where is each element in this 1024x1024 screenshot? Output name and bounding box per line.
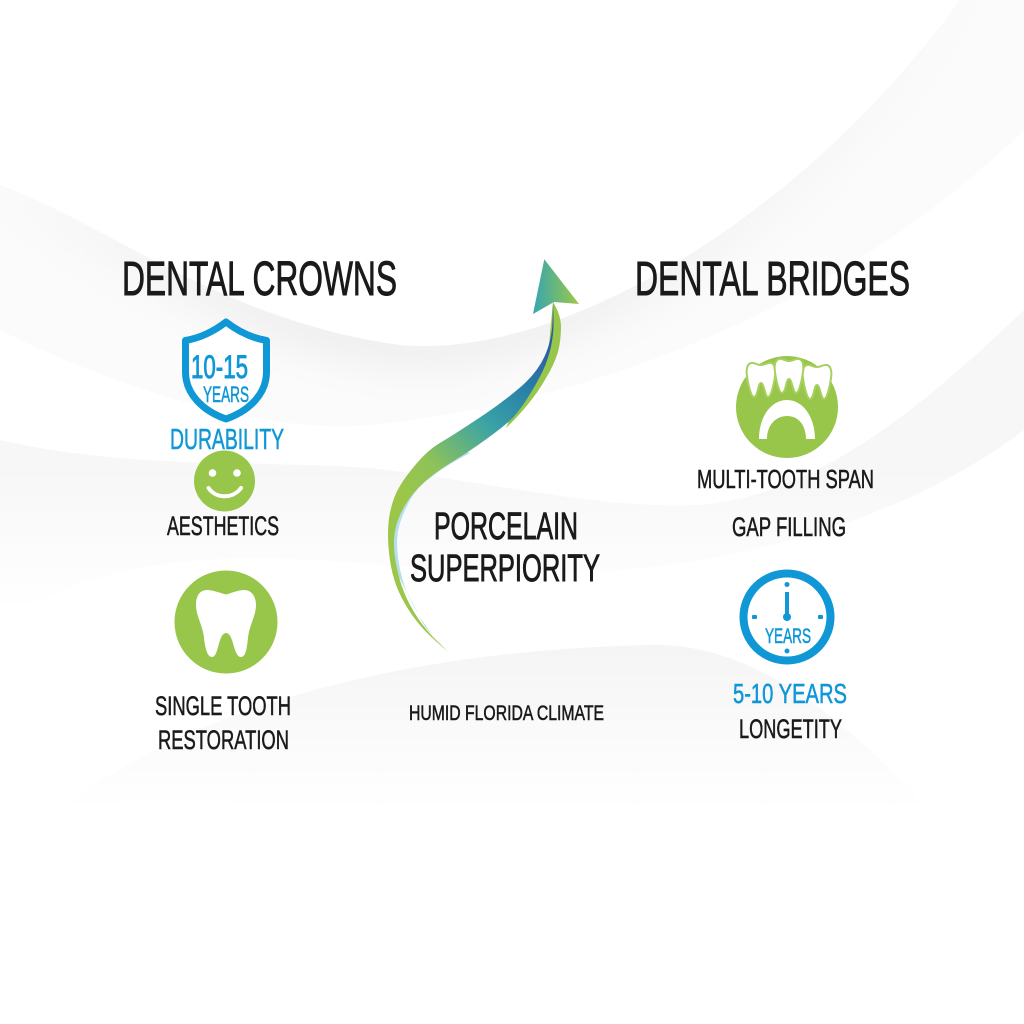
icon: durability shield: 10-15 <box>191 349 248 385</box>
label: single tooth restoration: RESTORATION <box>158 725 289 755</box>
arrow: rising ribbon <box>388 259 579 652</box>
label: single tooth restoration <box>155 691 291 755</box>
label: porcelain superiority <box>410 506 600 590</box>
icon: smiley <box>194 450 255 512</box>
icon: single tooth <box>174 570 278 674</box>
label: durability: DURABILITY <box>170 424 284 456</box>
tooth left <box>747 363 775 397</box>
label: gap filling: GAP FILLING <box>732 512 846 542</box>
label: longetity: LONGETITY <box>739 714 842 744</box>
label: porcelain superiority: PORCELAIN <box>434 506 578 548</box>
label: single tooth restoration: SINGLE TOOTH <box>155 691 291 721</box>
icon: durability shield <box>186 322 266 419</box>
label: humid florida climate: HUMID FLORIDA CLIMATE <box>409 702 604 725</box>
label: porcelain superiority: SUPERPIORITY <box>410 548 600 590</box>
icon: clock <box>744 574 830 660</box>
icon: clock: YEARS <box>765 625 811 648</box>
label: 5-10 years: 5-10 YEARS <box>733 678 847 709</box>
label: aesthetics: AESTHETICS <box>167 511 279 541</box>
label: multi-tooth span: MULTI-TOOTH SPAN <box>697 464 874 494</box>
tooth right <box>803 365 831 399</box>
icon: durability shield: YEARS <box>203 382 249 407</box>
bridge arch <box>759 400 815 439</box>
heading: dental crowns: DENTAL CROWNS <box>122 253 397 306</box>
tooth middle <box>775 359 803 393</box>
icon: multi-tooth bridge <box>736 356 838 458</box>
infographic canvas <box>109 196 909 750</box>
